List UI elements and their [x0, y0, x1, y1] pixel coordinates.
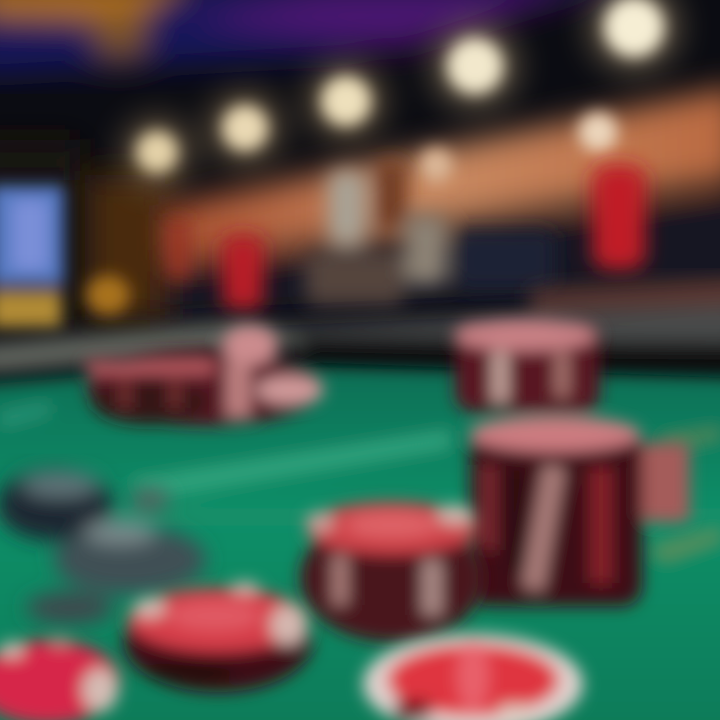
chip stack: centre	[300, 502, 484, 642]
blue screen at left	[0, 185, 130, 328]
ceiling lights: core	[136, 0, 664, 182]
chip stack: tall right	[453, 319, 690, 606]
chip: lower centre-left	[124, 582, 312, 692]
table rail	[0, 278, 720, 378]
figures: people in the background	[168, 160, 646, 310]
chip: bottom left	[0, 637, 120, 720]
chip: bottom centre	[363, 634, 583, 720]
grey chips at left	[0, 469, 206, 624]
green felt	[0, 365, 720, 720]
ceiling colour bands	[0, 0, 640, 75]
ceiling lights: glow	[121, 0, 680, 188]
chip stack: far left	[85, 325, 324, 426]
orange back wall band	[0, 85, 720, 320]
